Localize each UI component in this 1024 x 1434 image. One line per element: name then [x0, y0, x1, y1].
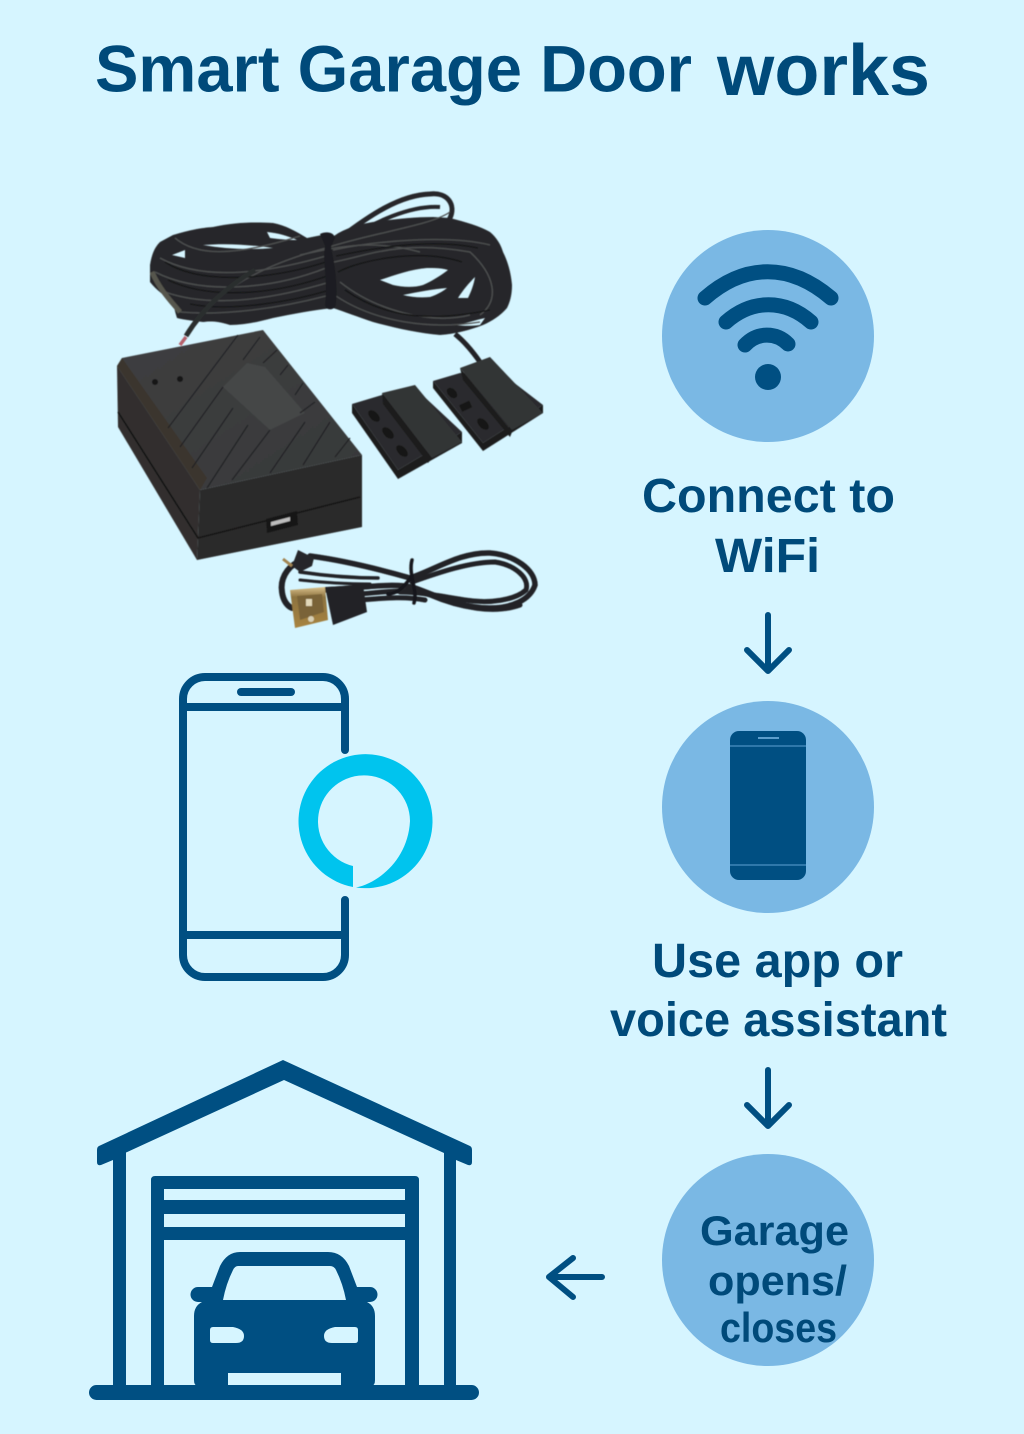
title: Smart Garage Door [95, 32, 692, 106]
ground [89, 1385, 479, 1400]
phone outline with voice assistant [183, 677, 433, 977]
status LEDs [152, 379, 158, 385]
cable bundle [150, 194, 512, 362]
USB-A connector [290, 587, 328, 628]
title [95, 31, 930, 111]
icon: smartphone [730, 731, 806, 880]
roof [97, 1060, 472, 1165]
magnetic sensor 2 [433, 357, 543, 451]
magnetic sensor 1 [352, 385, 462, 479]
step 2: phone circle [662, 701, 874, 913]
lead to box [186, 270, 255, 336]
cable highlights [155, 212, 492, 335]
label: Connect to WiFi: Connect to [642, 470, 895, 523]
arrow left [549, 1258, 602, 1297]
label: Use app or voice assistant: voice assistant [610, 994, 947, 1047]
title: works [716, 31, 930, 111]
USB micro plug [292, 550, 314, 572]
step 3: garage circle [662, 1154, 874, 1366]
product photo: smart garage controller kit [117, 194, 543, 628]
controller box: left side [117, 366, 200, 560]
phone outline [183, 677, 345, 977]
label: Garage opens/closes [700, 1207, 849, 1351]
controller box: front [197, 455, 362, 560]
cable mass [150, 217, 512, 335]
weathered cable edge [152, 272, 180, 312]
arrow down 2 [747, 1070, 789, 1126]
garage door frame [151, 1176, 419, 1388]
arrow down 1 [747, 615, 789, 671]
upper cable loop [340, 194, 452, 244]
label: Garage opens/closes: Garage [700, 1207, 849, 1254]
label: Connect to WiFi: WiFi [715, 530, 820, 583]
red wire end [180, 337, 186, 345]
garage icon [89, 1060, 479, 1400]
label: Garage opens/closes: opens/ [708, 1257, 847, 1304]
USB port [266, 511, 298, 533]
lead to sensor [455, 334, 480, 362]
label: Use app or voice assistant: Use app or [652, 935, 903, 988]
label: Connect to WiFi [642, 470, 895, 583]
label: Garage opens/closes: closes [720, 1304, 837, 1351]
icon: wifi [705, 272, 831, 390]
step 1: WiFi circle [662, 230, 874, 442]
label: Use app or voice assistant [610, 935, 947, 1047]
controller box: top [117, 330, 362, 490]
walls [113, 1150, 126, 1390]
zip tie [320, 232, 337, 309]
car [191, 1252, 378, 1386]
USB cable [282, 553, 535, 609]
voice assistant ring [299, 754, 433, 888]
